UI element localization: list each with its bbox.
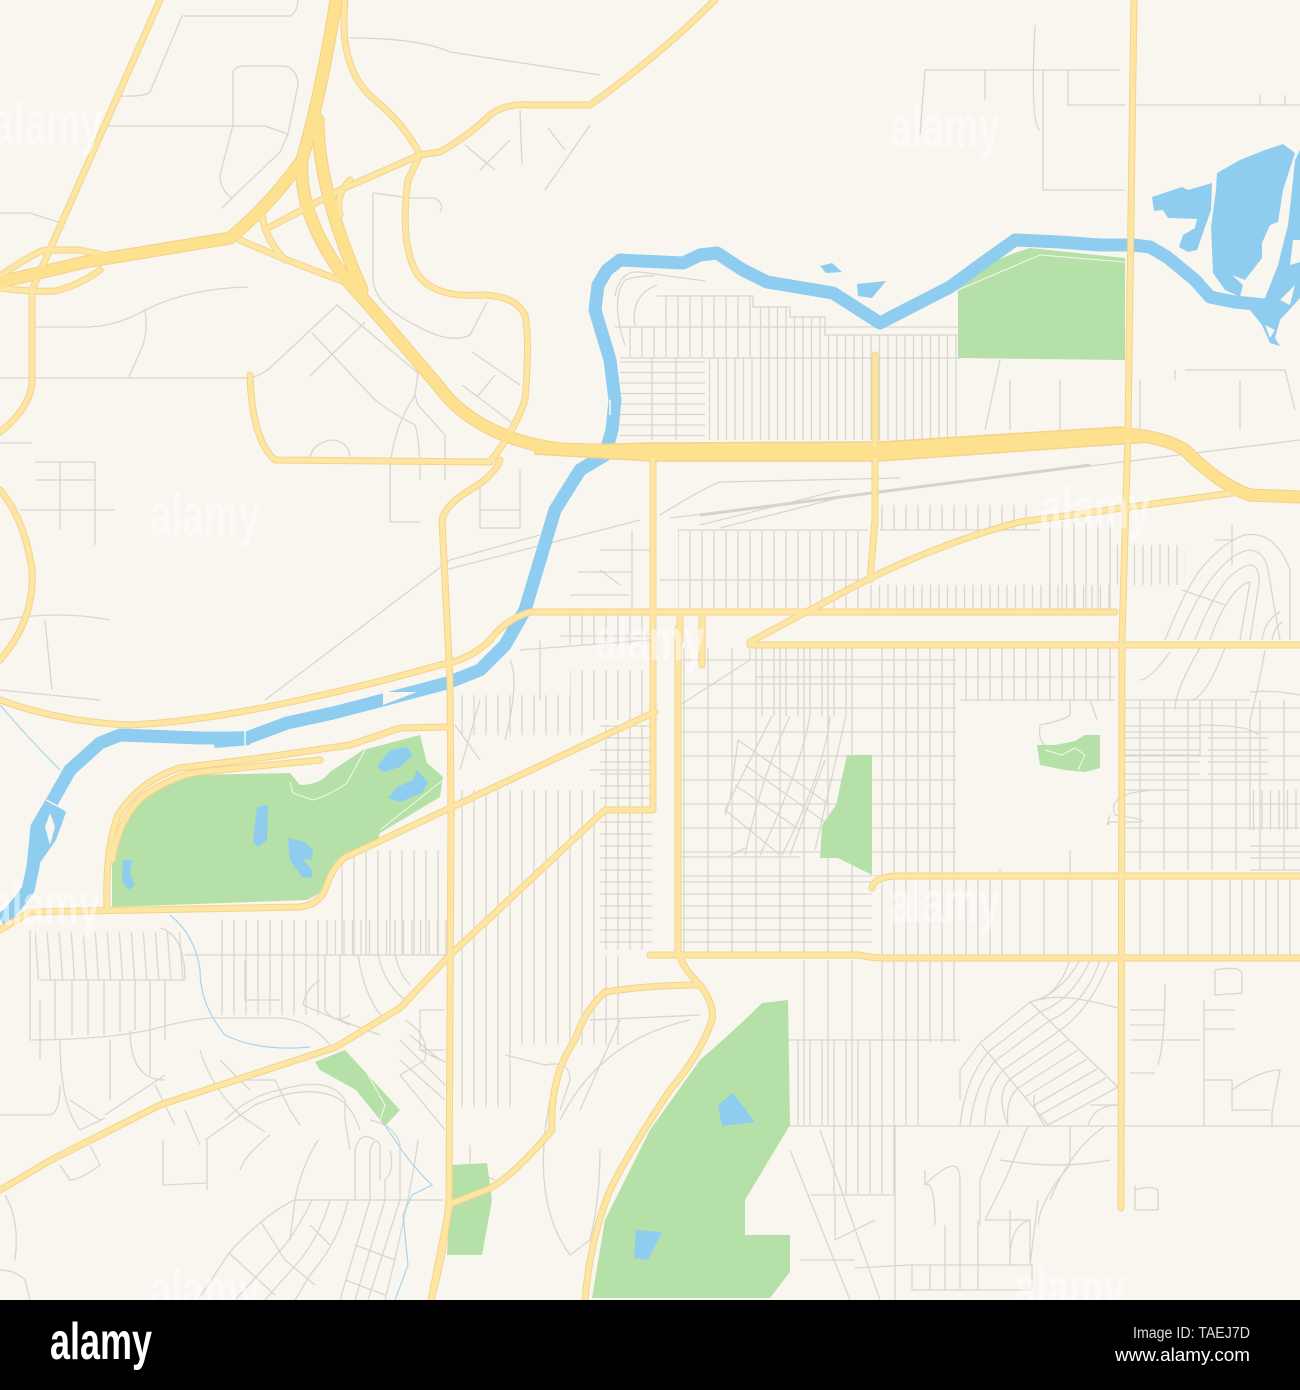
footer bar [0,1300,1300,1390]
downtown details [680,650,750,705]
watermarks: alamy [150,1258,260,1323]
alamy logo: alamy [50,1313,152,1371]
river delta and ponds [33,150,1300,1260]
south-west fan [198,1120,443,1300]
park: southwest small [447,1163,492,1255]
park: west riverside [112,735,443,907]
watermarks: alamy [890,95,1000,160]
watermarks: alamy [595,608,705,673]
highway fill [0,0,1300,497]
park: south large [592,1000,790,1298]
watermarks [0,91,1150,1323]
south-west fringes [30,930,330,1075]
east curves and blocks [1165,525,1290,640]
river islands and bridges [45,285,1295,845]
highway casing [0,0,1300,497]
watermarks: alamy [1040,476,1150,541]
river [0,240,1265,920]
image id: Image ID: TAEJ7D [1133,1325,1250,1342]
watermarks: alamy [1015,1256,1125,1321]
park paths [290,255,1125,1120]
watermarks: alamy [150,483,260,548]
north-east [920,25,1125,190]
lake: northeast west arm [1152,183,1212,252]
diagonal neighbourhood [680,716,846,857]
park: creek [315,1050,400,1126]
park: east [1037,735,1100,772]
lake: northeast main [1211,144,1295,297]
parks [112,248,1125,1298]
north cluster lines [615,272,960,440]
highway wide section [535,427,1150,461]
railway [265,440,1300,700]
east park paths [1040,700,1097,745]
creeks [0,705,432,1300]
park: central [820,755,872,875]
watermarks: alamy [890,870,1000,935]
park: north riverside [958,248,1125,360]
north-west [108,0,298,134]
south-east curves [980,1002,1118,1125]
website: www.alamy.com [1114,1344,1250,1365]
